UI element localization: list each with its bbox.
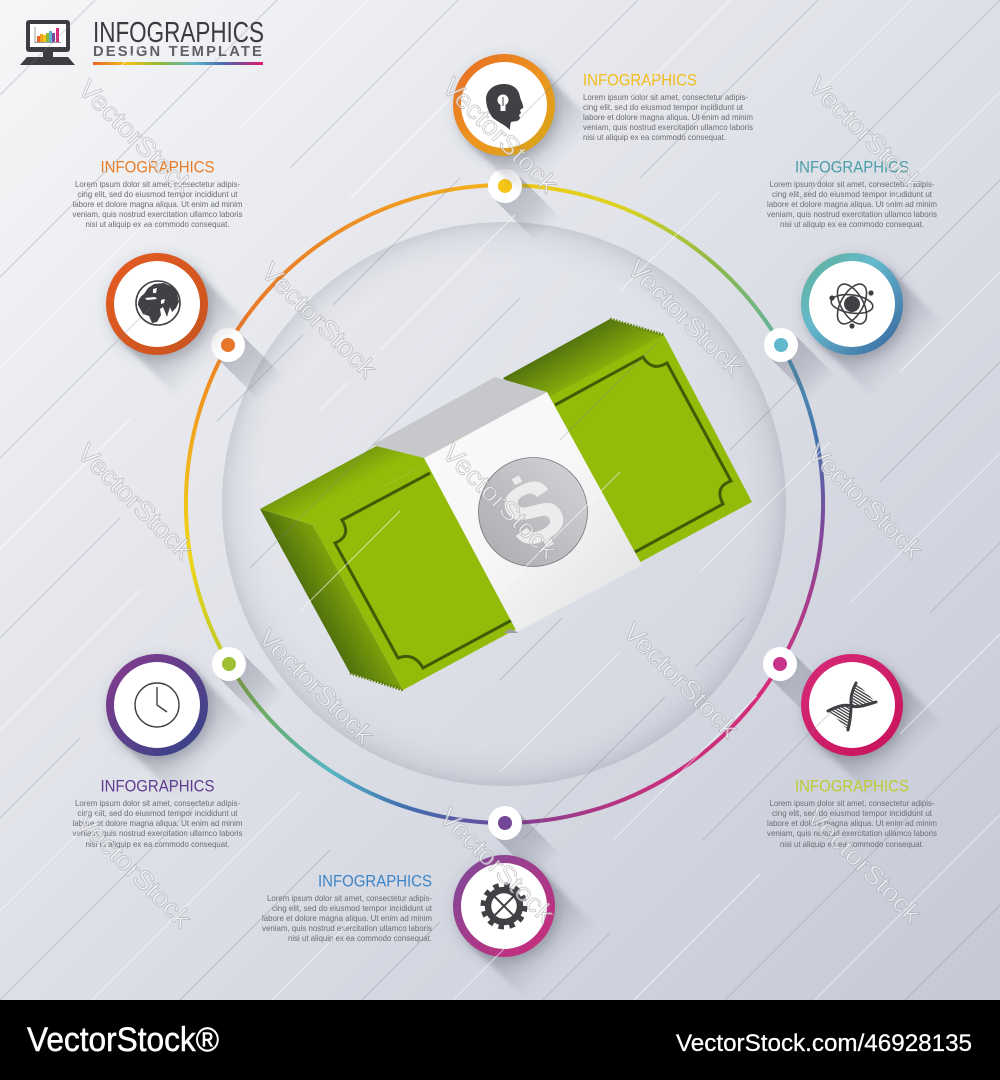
watermarks: VectorStock: [800, 801, 928, 929]
icon: globe: [136, 281, 180, 325]
paper band: [424, 392, 642, 632]
logo: title: DESIGN TEMPLATE: [93, 43, 264, 60]
text: lower right: cing elit, sed do eiusmod tempor incididunt ut: [772, 808, 933, 818]
text: lower right: labore et dolore magna aliqua. Ut enim ad minim: [767, 818, 937, 828]
item: upper right: [801, 253, 945, 397]
text: upper left: [72, 158, 243, 229]
text: upper right: INFOGRAPHICS: [795, 158, 909, 176]
watermarks: [70, 70, 930, 934]
item: lower left: [106, 654, 250, 798]
watermarks: VectorStock: [436, 71, 564, 199]
text: lower left: Lorem ipsum dolor sit amet, consectetur adipis-: [75, 798, 240, 808]
text: lower left: cing elit, sed do eiusmod tempor incididunt ut: [78, 808, 238, 818]
text: bottom: nisi ut aliquip ex ea commodo consequat.: [288, 933, 432, 943]
icon: head with light bulb: [486, 84, 523, 130]
text: bottom: [262, 872, 433, 943]
text: lower left: veniam, quis nostrud exercitation ullamco laboris: [72, 828, 242, 838]
text: lower right: nisi ut aliquip ex ea commodo consequat.: [780, 839, 924, 849]
text: upper left: nisi ut aliquip ex ea commodo consequat.: [86, 219, 230, 229]
item: lower right: [798, 652, 934, 786]
banknote stack illustration: [260, 319, 752, 690]
footer bar: [0, 1000, 1000, 1080]
text: lower right: Lorem ipsum dolor sit amet, consectetur adipis-: [770, 798, 935, 808]
watermarks: VectorStock: [70, 806, 198, 934]
footer bar: VectorStock®: [27, 1021, 219, 1059]
text: bottom: labore et dolore magna aliqua. Ut enim ad minim: [262, 913, 432, 923]
text: upper right: nisi ut aliquip ex ea commodo consequat.: [780, 219, 924, 229]
watermarks: VectorStock: [802, 70, 930, 198]
text: lower left: [72, 778, 243, 849]
text: lower right: [767, 778, 937, 849]
text: upper right: [767, 158, 937, 229]
icon: clock: [135, 683, 179, 727]
watermarks: VectorStock: [252, 622, 380, 750]
text: top: Lorem ipsum dolor sit amet, consectetur adipis-: [583, 92, 748, 102]
text: bottom: cing elit, sed do eiusmod tempor incididunt ut: [272, 903, 433, 913]
text: lower right: INFOGRAPHICS: [795, 778, 909, 796]
text: upper left: labore et dolore magna aliqua. Ut enim ad minim: [72, 199, 243, 209]
footer bar: VectorStock.com/46928135: [676, 1030, 972, 1057]
bill border: [335, 357, 731, 668]
logo: monitor icon: [20, 20, 75, 65]
text: lower left: labore et dolore magna aliqua. Ut enim ad minim: [72, 818, 243, 828]
text: top: labore et dolore magna aliqua. Ut enim ad minim: [583, 112, 753, 122]
logo: title: INFOGRAPHICS: [93, 17, 264, 49]
connector ring: [186, 185, 823, 823]
text: lower right: veniam, quis nostrud exercitation ullamco laboris: [767, 828, 937, 838]
text: bottom: veniam, quis nostrud exercitation ullamco laboris: [262, 923, 432, 933]
icon: gear: [483, 885, 525, 927]
coin with dollar sign: S: [489, 460, 579, 566]
node markers: [211, 169, 837, 879]
watermarks: VectorStock: [621, 253, 749, 381]
icon: dna helix: [826, 681, 878, 732]
text: lower left: nisi ut aliquip ex ea commodo consequat.: [86, 839, 230, 849]
text: bottom: INFOGRAPHICS: [318, 872, 432, 890]
item: top: [453, 54, 597, 198]
text: upper right: Lorem ipsum dolor sit amet, consectetur adipis-: [770, 179, 935, 189]
watermarks: VectorStock: [71, 437, 199, 565]
watermarks: VectorStock: [255, 256, 383, 384]
text: top: cing elit, sed do eiusmod tempor incididunt ut: [583, 102, 744, 112]
watermarks: VectorStock: [801, 437, 929, 565]
watermarks: VectorStock: [617, 616, 745, 744]
watermarks: VectorStock: [436, 437, 564, 565]
icon: atom: [830, 279, 874, 329]
text: top: [583, 72, 753, 142]
logo: title: [93, 17, 264, 65]
text: top: veniam, quis nostrud exercitation ullamco laboris: [583, 122, 753, 132]
central disc: [222, 222, 786, 786]
item: bottom: [453, 855, 597, 999]
watermarks: VectorStock: [72, 73, 200, 201]
text: upper left: cing elit, sed do eiusmod tempor incididunt ut: [78, 189, 238, 199]
text: upper left: Lorem ipsum dolor sit amet, consectetur adipis-: [75, 179, 240, 189]
text: upper left: veniam, quis nostrud exercitation ullamco laboris: [72, 209, 242, 219]
text: upper right: veniam, quis nostrud exercitation ullamco laboris: [767, 209, 937, 219]
text: top: nisi ut aliquip ex ea commodo consequat.: [583, 132, 726, 142]
text: top: INFOGRAPHICS: [583, 72, 697, 90]
text: upper left: INFOGRAPHICS: [100, 158, 214, 176]
watermarks: VectorStock: [433, 801, 561, 929]
text: upper right: cing elit, sed do eiusmod tempor incididunt ut: [772, 189, 933, 199]
item: upper left: [106, 253, 250, 397]
text: lower left: INFOGRAPHICS: [100, 778, 214, 796]
text: bottom: Lorem ipsum dolor sit amet, consectetur adipis-: [267, 893, 432, 903]
text: upper right: labore et dolore magna aliqua. Ut enim ad minim: [767, 199, 937, 209]
